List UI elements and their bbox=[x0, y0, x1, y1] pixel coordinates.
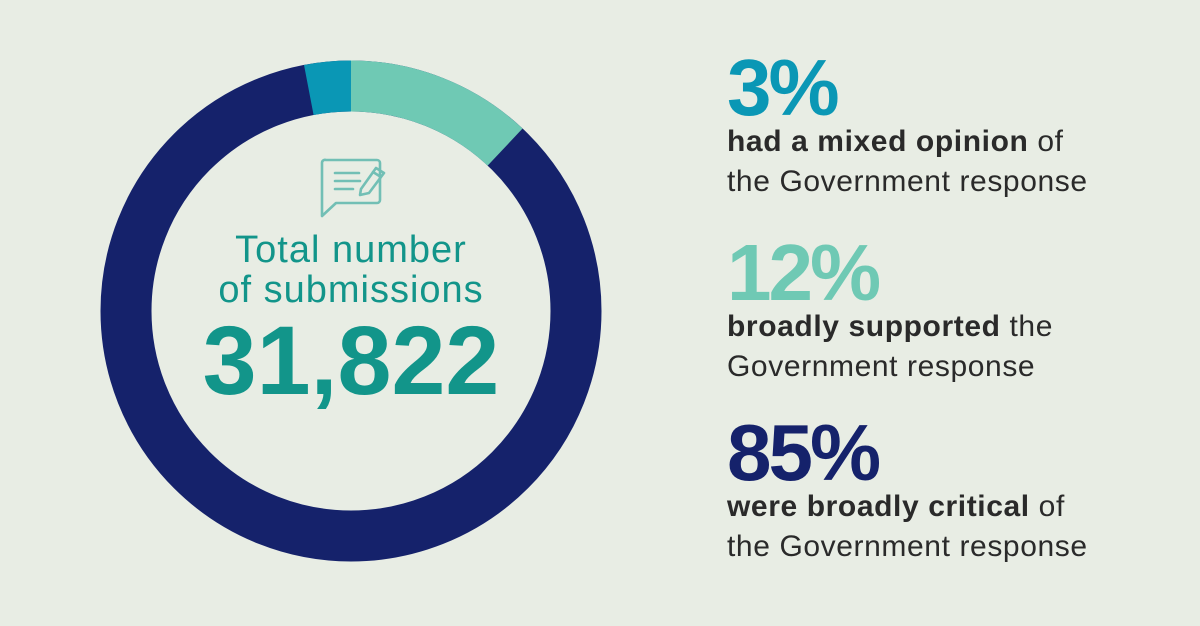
center text: total submissions: Total number bbox=[235, 229, 467, 271]
icon: speech bubble with pencil bbox=[322, 160, 384, 216]
center text: total submissions: of submissions bbox=[218, 269, 484, 311]
stat: mixed 3%: had a mixed opinion of bbox=[727, 125, 1064, 158]
donut chart bbox=[100, 60, 602, 562]
stat: supported 12% bbox=[727, 228, 1053, 383]
stat: critical 85%: were broadly critical of bbox=[727, 490, 1065, 523]
center text: total submissions bbox=[203, 229, 499, 415]
stat: critical 85% bbox=[726, 408, 1088, 563]
segment: critical 85% bbox=[126, 86, 576, 536]
stat: mixed 3% bbox=[727, 43, 1088, 198]
stat: supported 12%: Government response bbox=[727, 350, 1035, 383]
stat: supported 12%: broadly supported the bbox=[727, 310, 1053, 343]
stat: critical 85%: 85% bbox=[727, 408, 878, 497]
segment: supported 12% bbox=[351, 86, 505, 147]
center text: total submissions: 31,822 bbox=[203, 306, 499, 415]
stat: mixed 3%: the Government response bbox=[727, 165, 1088, 198]
stat: mixed 3%: 3% bbox=[727, 43, 837, 132]
stat: critical 85%: the Government response bbox=[727, 530, 1088, 563]
stat: supported 12%: 12% bbox=[727, 228, 878, 317]
segment: mixed 3% bbox=[309, 86, 351, 90]
